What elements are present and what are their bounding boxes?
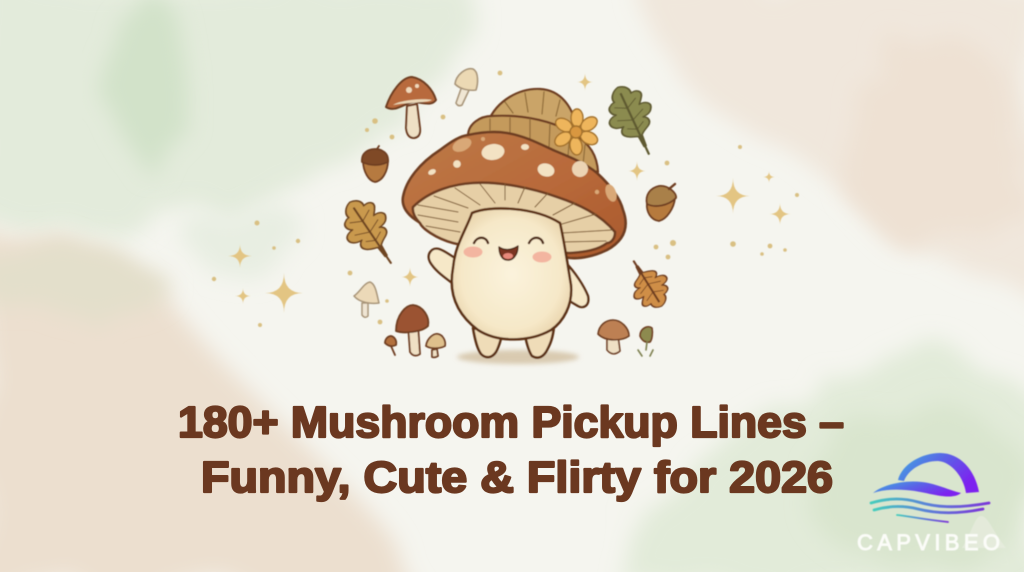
gold dots — [212, 71, 799, 327]
title — [178, 398, 844, 502]
acorn: left — [362, 146, 388, 182]
small mushroom: left pale — [354, 282, 379, 317]
illustration: mushroom character and autumn items — [212, 69, 799, 364]
oak leaf: gold — [331, 190, 409, 276]
small mushroom: top left — [386, 77, 436, 138]
small mushroom: top pale — [455, 69, 478, 106]
logo wordmark: CAPVIBEO — [857, 530, 1000, 555]
logo cap crown — [898, 453, 979, 493]
gold sparkles — [228, 73, 791, 313]
flower — [552, 109, 600, 156]
acorn: right — [647, 184, 676, 221]
mushroom cap — [403, 132, 626, 258]
feet — [473, 326, 554, 358]
title line 2: Funny, Cute & Flirty for 2026 — [201, 453, 833, 502]
ground shadow — [457, 350, 579, 364]
right arm — [555, 262, 588, 307]
small mushroom group: bottom left — [385, 305, 445, 357]
oak leaf: orange — [618, 251, 678, 316]
body — [452, 208, 571, 339]
small mushrooms: bottom right — [598, 320, 653, 356]
waving arm — [429, 249, 462, 283]
logo waves — [871, 499, 989, 522]
beanie hat with flower — [468, 89, 600, 172]
face — [464, 238, 552, 262]
title line 1: 180+ Mushroom Pickup Lines – — [178, 398, 844, 447]
logo: Capvibeo — [857, 453, 1006, 555]
logo cap brim — [873, 481, 961, 496]
oak leaf: olive — [597, 78, 669, 164]
